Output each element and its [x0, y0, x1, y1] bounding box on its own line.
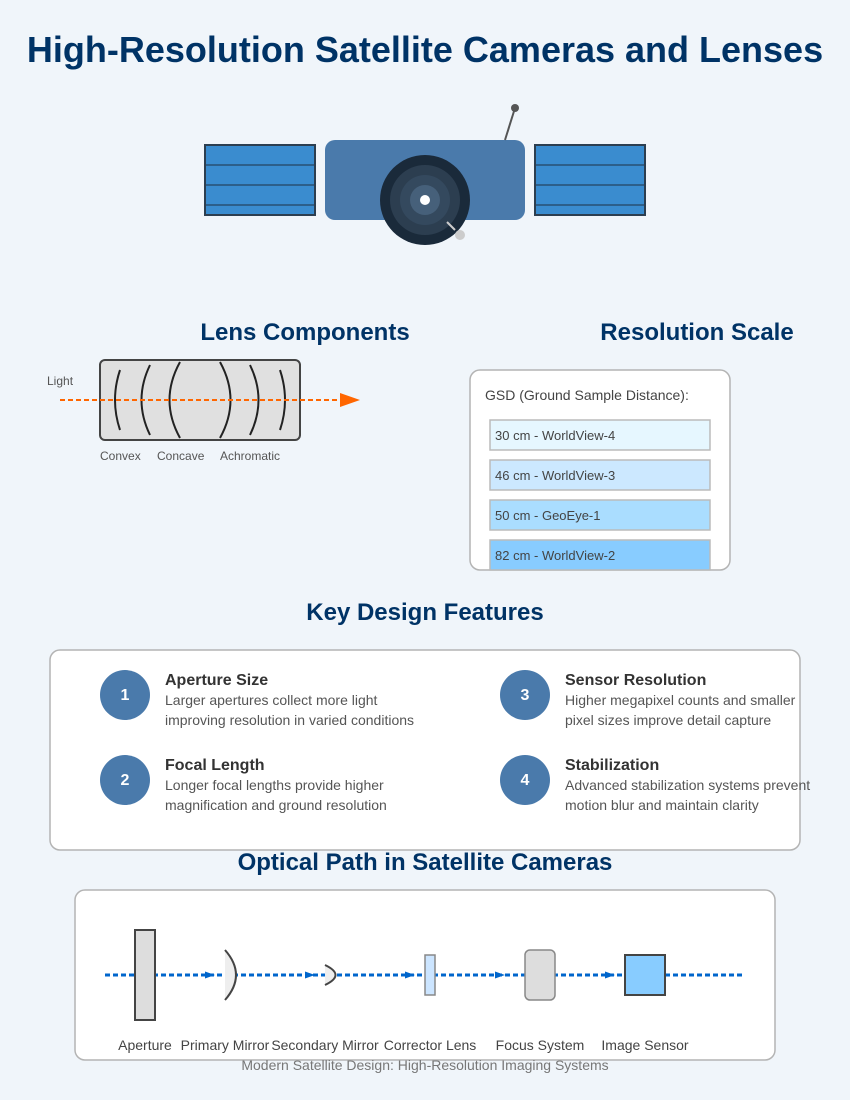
feature 3: sensor resolution: pixel sizes improve detail capture	[565, 712, 771, 728]
label: secondary mirror: Secondary Mirror	[271, 1037, 379, 1053]
bar: GeoEye-1: 50 cm - GeoEye-1	[495, 508, 600, 523]
label: corrector lens: Corrector Lens	[384, 1037, 476, 1053]
feature 2: focal length: Longer focal lengths provide higher	[165, 777, 384, 793]
bar: WorldView-4: 30 cm - WorldView-4	[495, 428, 615, 443]
left solar panel	[205, 145, 315, 215]
focus system	[525, 950, 555, 1000]
bar: WorldView-2	[490, 540, 710, 570]
label: image sensor: Image Sensor	[601, 1037, 689, 1053]
feature 2: focal length	[100, 755, 387, 813]
bar: WorldView-3	[490, 460, 710, 490]
heading: key design features: Key Design Features	[306, 599, 544, 626]
right solar panel	[535, 145, 645, 215]
lens barrel	[100, 360, 300, 440]
label: focus system: Focus System	[496, 1037, 584, 1053]
camera lens	[380, 155, 470, 245]
primary mirror	[225, 950, 236, 1000]
corrector lens	[425, 955, 435, 995]
feature 2: focal length: 2	[121, 772, 130, 789]
label: primary mirror: Primary Mirror	[181, 1037, 270, 1053]
bar: WorldView-2: 82 cm - WorldView-2	[495, 548, 615, 563]
panel: key design features	[50, 650, 810, 850]
bar: GeoEye-1	[490, 500, 710, 530]
label: achromatic: Achromatic	[220, 449, 280, 463]
panel: optical path	[75, 890, 775, 1060]
bar: WorldView-4	[490, 420, 710, 450]
feature 1: aperture size	[100, 670, 414, 728]
feature 4: stabilization	[500, 755, 810, 813]
feature 3: sensor resolution: 3	[521, 687, 530, 704]
heading: optical path: Optical Path in Satellite Cameras	[238, 849, 612, 876]
image sensor	[625, 955, 665, 995]
label: convex: Convex	[100, 449, 141, 463]
feature 2: focal length: Focal Length	[165, 757, 265, 774]
feature 4: stabilization: Stabilization	[565, 757, 659, 774]
label: light: Light	[47, 374, 74, 388]
satellite illustration	[205, 104, 645, 245]
feature 3: sensor resolution: Higher megapixel counts and smaller	[565, 692, 796, 708]
label: aperture: Aperture	[118, 1037, 172, 1053]
feature 1: aperture size: Aperture Size	[165, 672, 268, 689]
antenna	[505, 104, 519, 140]
aperture	[135, 930, 155, 1020]
feature 3: sensor resolution: Sensor Resolution	[565, 672, 706, 689]
panel subtitle: GSD (Ground Sample Distance):	[485, 387, 689, 403]
secondary mirror	[325, 965, 336, 985]
light path	[105, 972, 745, 978]
feature 4: stabilization: motion blur and maintain clarity	[565, 797, 759, 813]
footer caption: Modern Satellite Design: High-Resolution Imaging Systems	[241, 1057, 609, 1073]
title: High-Resolution Satellite Cameras and Lenses	[27, 29, 823, 70]
bar: WorldView-3: 46 cm - WorldView-3	[495, 468, 615, 483]
feature 1: aperture size: 1	[121, 687, 130, 704]
lens components diagram	[47, 360, 360, 463]
satellite body	[325, 140, 525, 220]
feature 4: stabilization: 4	[521, 772, 530, 789]
heading: lens components: Lens Components	[200, 319, 410, 346]
feature 2: focal length: magnification and ground resolution	[165, 797, 387, 813]
feature 1: aperture size: improving resolution in varied conditions	[165, 712, 414, 728]
label: concave: Concave	[157, 449, 205, 463]
feature 1: aperture size: Larger apertures collect more light	[165, 692, 378, 708]
lens elements	[115, 362, 285, 438]
panel: resolution scale	[470, 370, 730, 570]
heading: resolution scale: Resolution Scale	[600, 319, 794, 346]
feature 4: stabilization: Advanced stabilization systems prevent	[565, 777, 810, 793]
feature 3: sensor resolution	[500, 670, 796, 728]
light ray arrow	[60, 393, 360, 407]
